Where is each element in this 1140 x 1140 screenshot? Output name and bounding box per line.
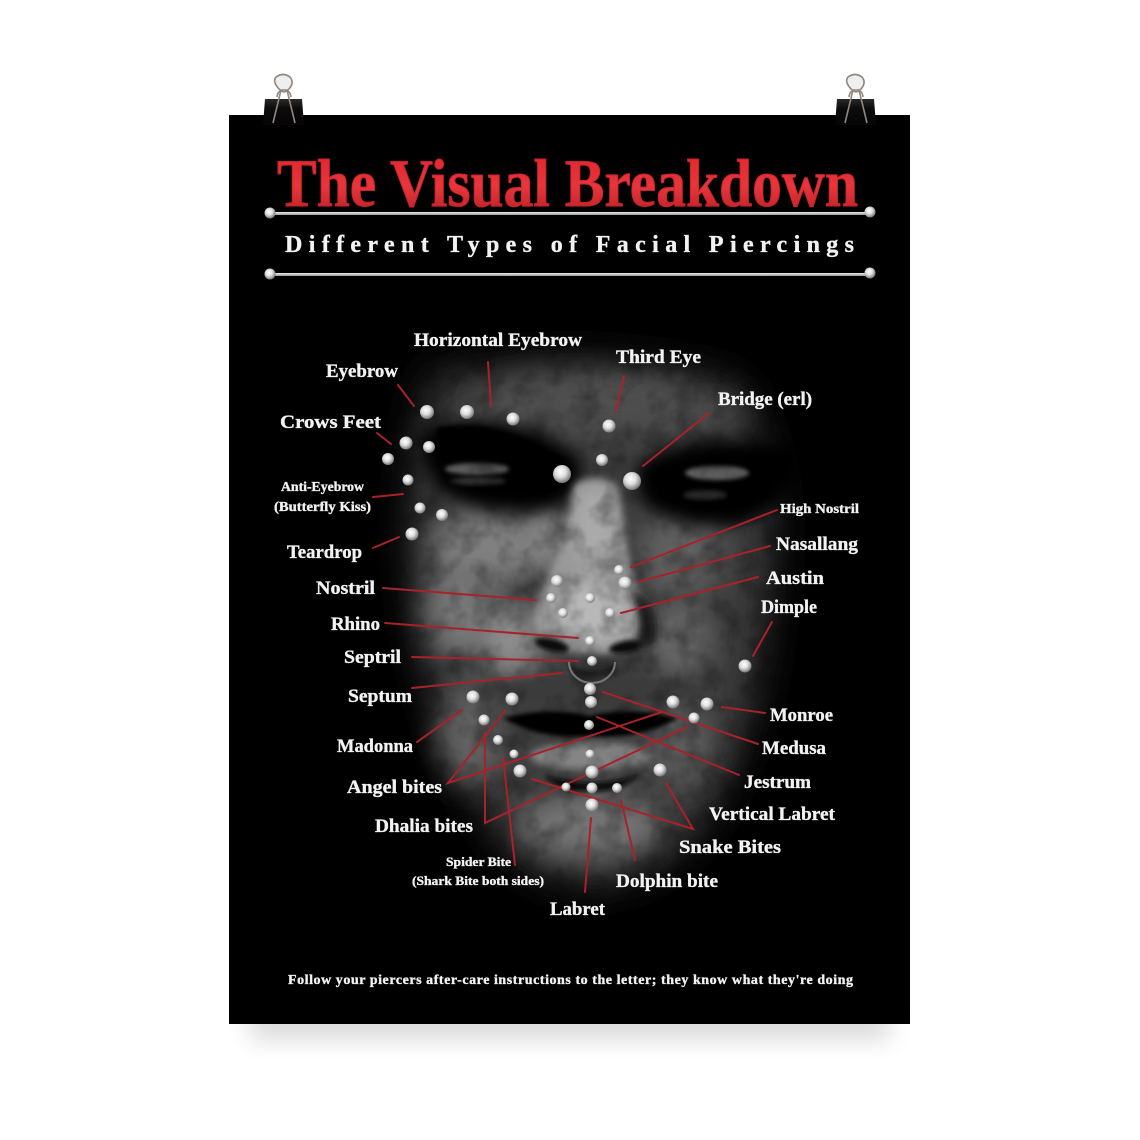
label: Jestrum [597,717,811,793]
label: Angel bites [347,711,662,798]
label: Spider Bite (Shark Bite both sides): Spider Bite [446,855,511,869]
label: Angel bites: Angel bites [347,777,442,798]
subtitle: Different Types of Facial Piercings [285,232,854,258]
label: Septril: Septril [344,647,401,668]
label: Anti-Eyebrow (Butterfly Kiss) [274,479,403,514]
label: Madonna [337,710,462,757]
footer note: Follow your piercers after-care instructions to the letter; they know what they're doing [288,973,853,988]
label: Monroe: Monroe [770,705,833,726]
label: Horizontal Eyebrow: Horizontal Eyebrow [414,330,582,351]
label: Labret [550,818,606,920]
label: Nostril: Nostril [316,578,375,599]
label: Rhino [331,614,578,638]
title: The Visual Breakdown [277,145,858,221]
label: Austin [621,568,824,613]
binder clip right [835,74,876,125]
label: Vertical Labret: Vertical Labret [709,804,836,825]
painterly texture [416,358,773,880]
eye sockets [422,422,795,525]
label: Austin: Austin [766,568,824,589]
label: Teardrop [287,537,399,563]
label: Snake Bites [532,779,781,858]
label: Bridge (erl) [643,389,812,466]
face portrait [389,342,792,904]
label: Rhino: Rhino [331,614,380,635]
label: Teardrop: Teardrop [287,542,362,563]
label: Nasallang [638,534,859,582]
label: Bridge (erl): Bridge (erl) [718,389,812,410]
label: Anti-Eyebrow (Butterfly Kiss): Anti-Eyebrow [281,479,364,494]
label: Dimple [753,597,817,656]
label: Medusa [603,692,826,759]
piercing studs [382,405,752,812]
label: Septum [348,673,562,707]
label: Labret: Labret [550,899,606,920]
poster infographic [229,74,910,1048]
mouth [470,677,710,791]
label: Dhalia bites: Dhalia bites [375,816,473,837]
poster shadow [250,1005,890,1040]
label: Dhalia bites [375,727,687,837]
label: Horizontal Eyebrow [414,330,582,406]
label: Madonna: Madonna [337,736,413,757]
label: Spider Bite (Shark Bite both sides): (Shark Bite both sides) [412,874,544,888]
label: Spider Bite (Shark Bite both sides) [412,757,544,888]
label: Eyebrow: Eyebrow [326,361,398,382]
subtitle rod [264,268,876,280]
label: Septril [344,647,578,668]
septum ring [569,662,615,683]
binder clip left [263,74,304,125]
label: Eyebrow [326,361,414,406]
label: High Nostril: High Nostril [780,502,859,517]
label: Third Eye: Third Eye [616,347,701,368]
label: Third Eye [616,347,701,411]
label: Dimple: Dimple [761,597,817,618]
label: High Nostril [631,502,859,567]
label: Monroe [722,705,833,726]
nose [533,479,656,680]
label: Medusa: Medusa [762,738,826,759]
label: Septum: Septum [348,686,412,707]
label: Crows Feet [280,412,391,444]
label: Nasallang: Nasallang [776,534,859,555]
label: Dolphin bite [616,800,718,892]
label: Dolphin bite: Dolphin bite [616,871,718,892]
title rod [264,206,876,218]
label: Jestrum: Jestrum [744,772,811,793]
label: Crows Feet: Crows Feet [280,412,382,433]
poster black background [229,115,910,1024]
label: Snake Bites: Snake Bites [679,837,781,858]
label: Anti-Eyebrow (Butterfly Kiss): (Butterfly Kiss) [274,499,371,514]
label: Nostril [316,578,536,600]
